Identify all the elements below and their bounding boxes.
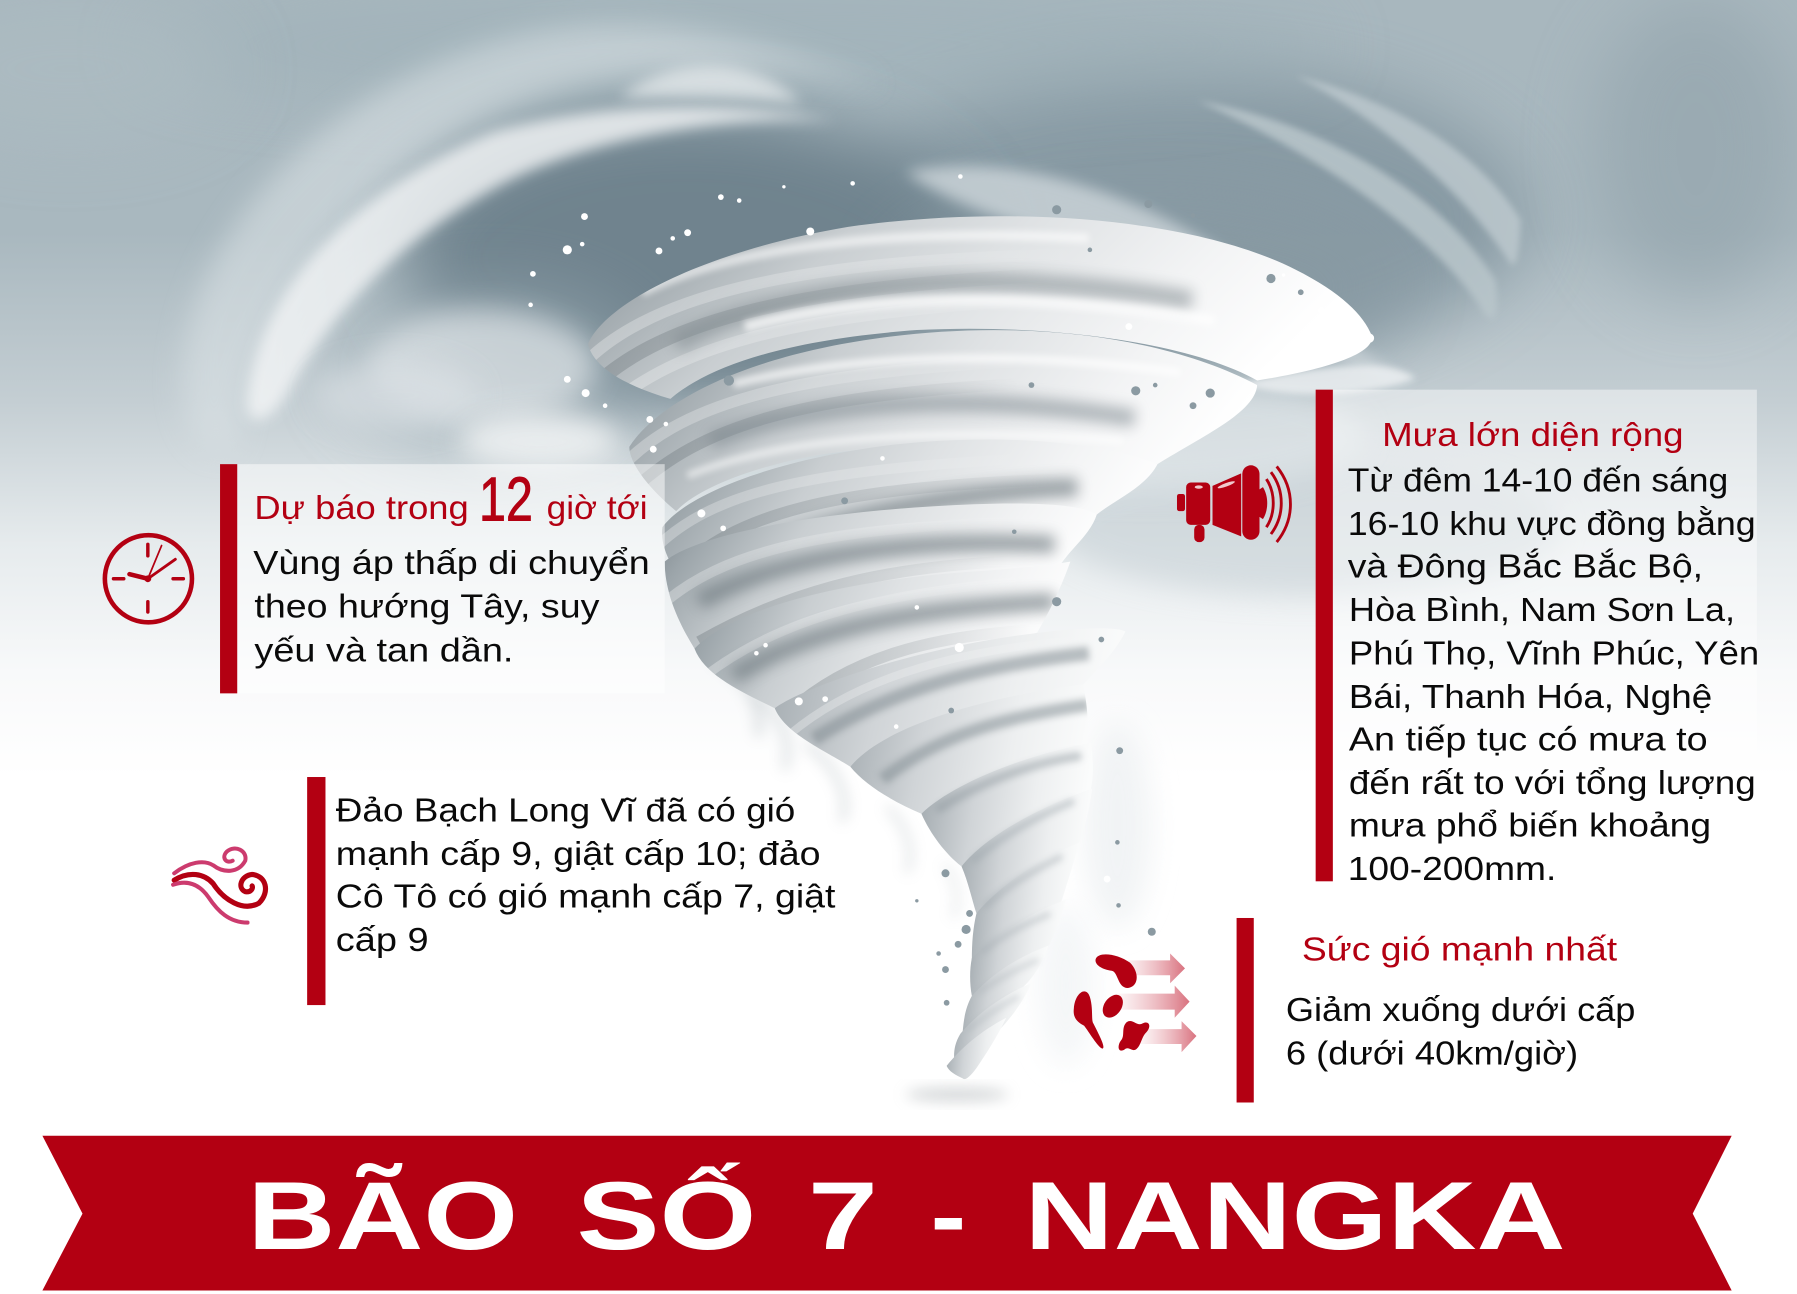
heading: [254, 465, 648, 534]
title: BÃO: [248, 1162, 518, 1270]
body text: và Đông Bắc Bắc Bộ,: [1348, 548, 1703, 586]
title: SỐ: [576, 1162, 756, 1270]
icon: flying debris with arrows: [1074, 954, 1196, 1052]
tornado band 1: [589, 216, 1371, 399]
mist fibres below bands: [716, 659, 957, 917]
tornado tail streaks: [940, 756, 1077, 1029]
tornado band 2: [629, 330, 1257, 511]
body text: Đảo Bạch Long Vĩ đã có gió: [336, 793, 795, 830]
red bar: [1316, 390, 1333, 881]
panel: strongest wind: [1237, 918, 1635, 1102]
body text: yếu và tan dần.: [254, 632, 513, 669]
body text: cấp 9: [336, 922, 429, 959]
title: 7: [808, 1163, 878, 1270]
icon: megaphone: [1177, 465, 1290, 542]
body text: Hòa Bình, Nam Sơn La,: [1349, 592, 1735, 629]
body text: Từ đêm 14-10 đến sáng: [1348, 463, 1728, 500]
tornado: [528, 174, 1387, 1079]
body text: 16-10 khu vực đồng bằng: [1348, 505, 1756, 543]
tornado band 5: [694, 562, 1070, 708]
heading: Mưa lớn diện rộng: [1382, 417, 1684, 454]
title: -: [931, 1163, 966, 1270]
body text: Vùng áp thấp di chuyển: [253, 545, 650, 582]
body text: [336, 793, 835, 959]
heading: Sức gió mạnh nhất: [1302, 931, 1617, 968]
red bar: [1237, 918, 1254, 1102]
body text: [253, 545, 650, 669]
body text: Phú Thọ, Vĩnh Phúc, Yên: [1349, 636, 1759, 673]
body text: Cô Tô có gió mạnh cấp 7, giật: [336, 879, 835, 916]
body text: theo hướng Tây, suy: [254, 589, 600, 626]
tornado band 8: [921, 743, 1093, 866]
heading: Dự báo trong: [254, 490, 469, 527]
heading: giờ tới: [547, 490, 648, 527]
body text: mạnh cấp 9, giật cấp 10; đảo: [336, 836, 821, 873]
panel: forecast next 12 hours: [220, 464, 665, 693]
tornado band 10: [972, 842, 1080, 960]
body text: Bái, Thanh Hóa, Nghệ: [1349, 679, 1712, 716]
body text: 100-200mm.: [1348, 851, 1556, 888]
tornado band 9: [962, 788, 1092, 913]
panel background: [220, 464, 665, 693]
tornado band 3: [662, 440, 1158, 558]
panel: wind observations: [307, 777, 835, 1005]
heading: 12: [479, 465, 533, 534]
tornado band 6: [774, 634, 1092, 766]
body text: [1348, 463, 1759, 888]
icon: wind swirl: [173, 849, 266, 923]
body text: [1286, 992, 1635, 1073]
red bar: [307, 777, 325, 1005]
tornado band 11: [970, 900, 1066, 996]
icon: clock: [105, 535, 192, 622]
title: [248, 1162, 1565, 1270]
title ribbon: [42, 1136, 1732, 1290]
tornado band 4: [664, 504, 1096, 648]
debris particles: [528, 174, 1374, 1006]
tornado band 13: [954, 983, 1031, 1066]
body text: 6 (dưới 40km/giờ): [1286, 1036, 1578, 1073]
ribbon shape: [42, 1136, 1732, 1290]
body text: An tiếp tục có mưa to: [1349, 722, 1708, 759]
body text: đến rất to với tổng lượng: [1349, 765, 1756, 802]
title: NANGKA: [1025, 1163, 1565, 1270]
red bar: [220, 464, 237, 693]
panel background: [1316, 390, 1757, 881]
body text: Giảm xuống dưới cấp: [1286, 992, 1635, 1029]
tornado band 7: [850, 695, 1088, 814]
panel: heavy rain: [1316, 390, 1759, 888]
body text: mưa phổ biến khoảng: [1349, 808, 1711, 845]
tornado band 14: [947, 1018, 1006, 1079]
tornado band 12: [963, 945, 1049, 1031]
